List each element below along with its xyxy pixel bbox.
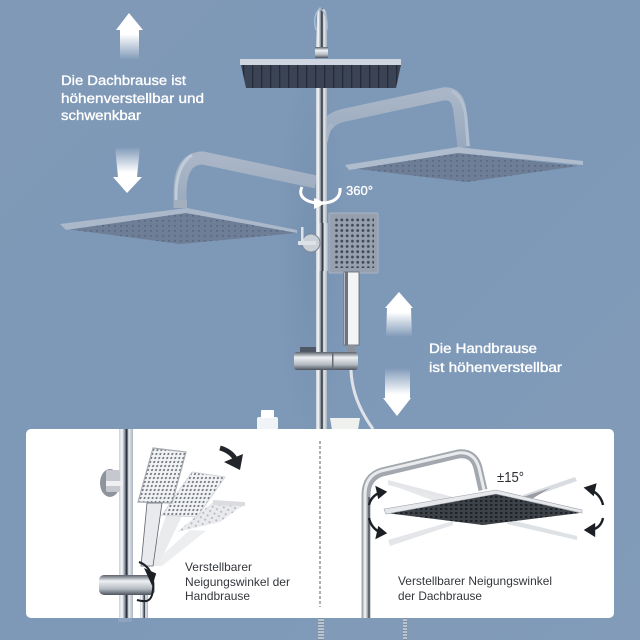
arrow up: head shower: [116, 13, 143, 60]
arm and pole detail: [365, 453, 484, 618]
hand shower: [329, 213, 378, 352]
faded handle positions: [148, 516, 206, 566]
arrow down: head shower: [113, 147, 142, 193]
rotation arrow 360: 360°: [346, 184, 373, 198]
hand head upright: [138, 448, 186, 503]
clamp rotation arrow: [137, 562, 155, 601]
main head face: [386, 494, 580, 525]
caption right: der Dachbrause: [398, 589, 482, 603]
hose: [351, 370, 373, 429]
hose below clamp: [140, 595, 148, 618]
detail: hand shower tilt: [99, 429, 290, 618]
main head plate: [384, 490, 582, 514]
swivelled left shower head (ghosted): [60, 155, 316, 244]
swivelled right shower head (ghosted): [325, 91, 583, 182]
toiletry bottle: [257, 410, 278, 430]
arrow up: hand shower: [385, 292, 413, 337]
text: Handbrause: Die Handbrause: [429, 341, 537, 356]
handle upright: [141, 503, 162, 566]
toiletry tube: [330, 418, 360, 430]
white detail panel: [26, 429, 614, 618]
text: Dachbrause: [61, 73, 204, 123]
caption left: Verstellbarer: [185, 560, 252, 574]
lower pole and hose strips: [118, 618, 407, 640]
arc arrows left: [369, 488, 385, 537]
text: Dachbrause: höhenverstellbar und: [61, 91, 204, 106]
text: Dachbrause: schwenkbar: [61, 108, 142, 123]
caption left: Handbrause: [185, 589, 250, 603]
tilted head position 2: [162, 472, 225, 517]
wall bracket and holder: [298, 227, 320, 252]
arc arrows right: [586, 485, 603, 535]
top shower head: [240, 59, 401, 88]
tilt angle label: ±15°: [497, 470, 524, 486]
pole sleeve: [316, 223, 328, 271]
caption right: [398, 574, 552, 603]
slide pole: [119, 429, 133, 618]
rotation arrow 360: [301, 184, 373, 209]
caption right: Verstellbarer Neigungswinkel: [398, 574, 552, 588]
top gooseneck: [315, 8, 328, 58]
arrow down: hand shower: [383, 368, 411, 416]
text: Dachbrause: Die Dachbrause ist: [61, 73, 186, 88]
tilted head position 3: [177, 500, 245, 532]
soft shadow around pole: [276, 30, 348, 470]
wall bracket detail: [100, 469, 123, 497]
detail: head shower tilt: [365, 453, 603, 618]
tilted ghost heads: [388, 477, 577, 546]
black tilt arrow: [220, 448, 243, 470]
shower pole: [316, 88, 327, 430]
panel divider: [319, 441, 321, 607]
caption left: Neigungswinkel der: [185, 575, 290, 589]
text: Handbrause: ist höhenverstellbar: [429, 360, 563, 375]
hand shower clamp: [294, 347, 358, 370]
clamp detail: [99, 575, 155, 595]
caption left: [185, 560, 290, 603]
text: Handbrause: [429, 341, 563, 375]
